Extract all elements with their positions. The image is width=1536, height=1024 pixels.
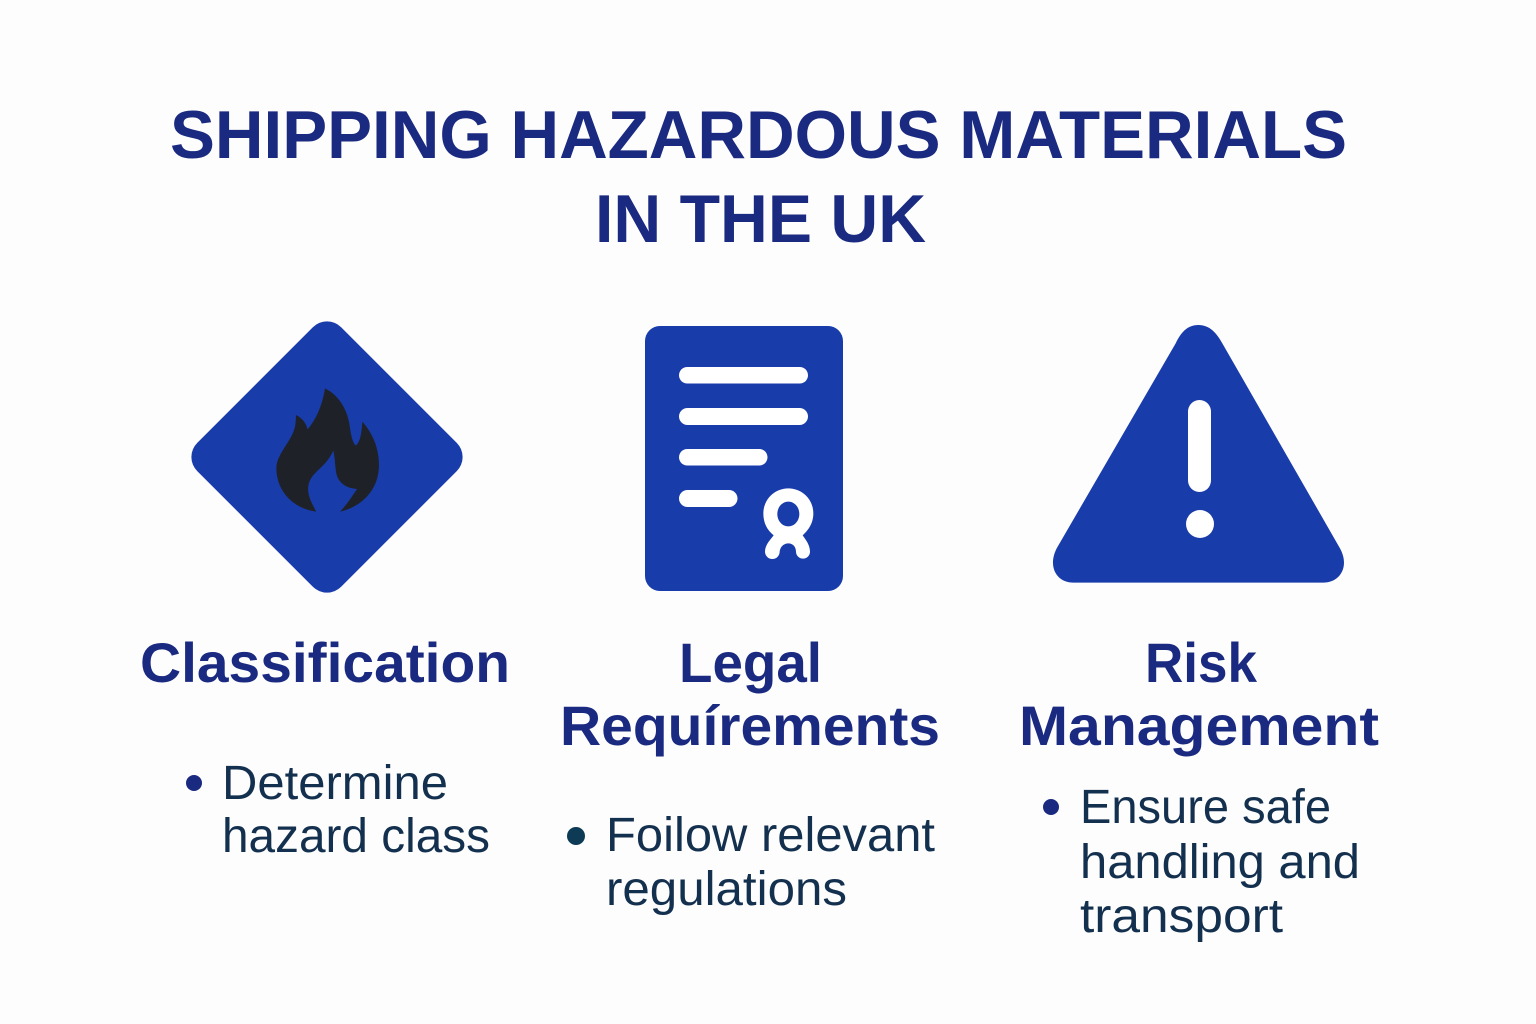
heading: risk management: Management — [1019, 694, 1379, 757]
heading: risk management: Risk — [1145, 631, 1258, 694]
heading: legal requirements: Requírements — [560, 694, 940, 757]
title: SHIPPING HAZARDOUS MATERIALS — [170, 97, 1347, 173]
heading: risk management — [1019, 631, 1379, 757]
panel: classification — [140, 313, 510, 863]
bullet point: follow relevant regulations: Foilow relevant — [606, 809, 935, 862]
bullet point: ensure safe handling and transport: handling and — [1080, 836, 1360, 889]
bullet point: ensure safe handling and transport: transport — [1080, 890, 1283, 943]
heading: legal requirements — [560, 631, 940, 757]
bullet point: ensure safe handling and transport: Ensure safe — [1080, 781, 1331, 834]
bullet point: follow relevant regulations: regulations — [606, 863, 847, 916]
icon: flame in diamond — [183, 313, 471, 601]
panel: legal requirements — [560, 326, 940, 916]
bullet point: determine hazard class: hazard class — [222, 810, 490, 863]
bullet point: determine hazard class — [186, 757, 490, 863]
title: IN THE UK — [595, 181, 926, 257]
bullet point: determine hazard class: Determine — [222, 757, 448, 810]
title — [170, 97, 1347, 257]
heading: legal requirements: Legal — [679, 631, 822, 694]
panel: risk management — [1019, 325, 1379, 943]
bullet point: follow relevant regulations — [567, 809, 935, 916]
icon: document with seal — [645, 326, 843, 591]
icon: warning triangle — [1053, 325, 1344, 583]
bullet point: ensure safe handling and transport — [1043, 781, 1360, 943]
heading: classification: Classification — [140, 631, 510, 694]
